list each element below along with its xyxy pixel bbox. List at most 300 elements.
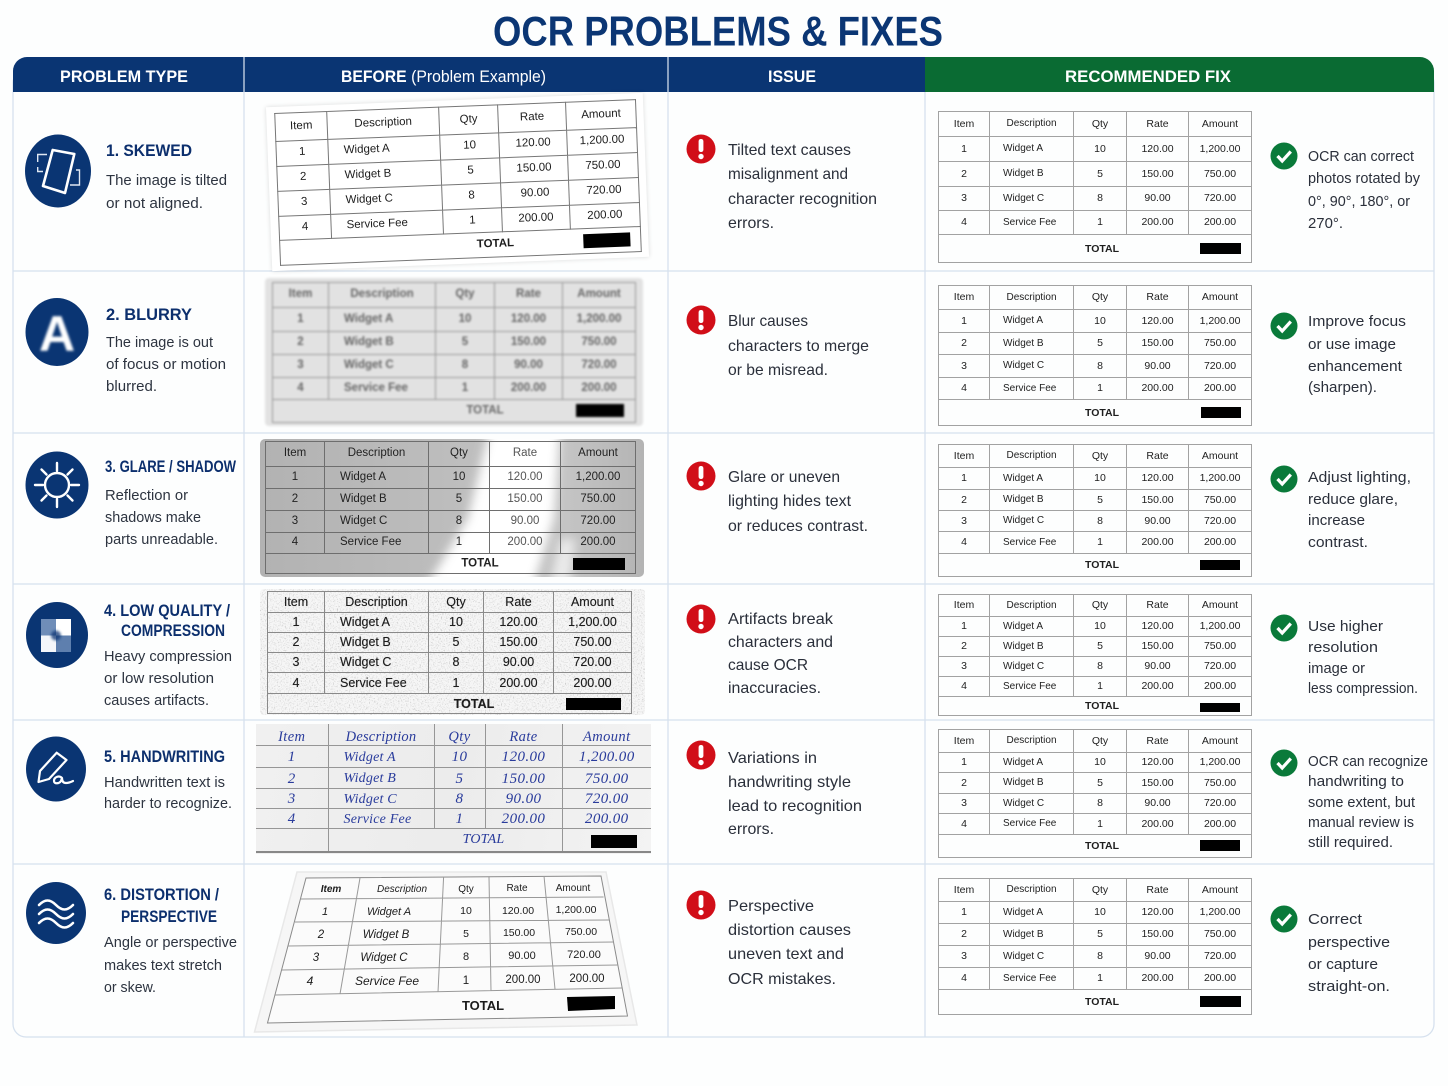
fix table: blurry: Amount <box>1202 291 1238 303</box>
before table: skewed <box>266 93 649 271</box>
fix table: handwriting: Widget B <box>1003 777 1044 788</box>
before table: perspective: Item <box>321 884 341 895</box>
before table: perspective: 750.00 <box>565 926 597 938</box>
description: blurry: The image is out <box>106 334 214 351</box>
fix table: distortion: Rate <box>1146 884 1169 896</box>
fix table: blurry: 750.00 <box>1204 337 1236 349</box>
icon: check <box>1270 906 1298 932</box>
before table: low quality: 10 <box>449 615 463 629</box>
fix table: glare: 90.00 <box>1144 515 1171 527</box>
before table: perspective: 720.00 <box>567 949 601 961</box>
row 5: handwriting <box>26 724 1428 858</box>
fix table: handwriting: Amount <box>1202 735 1238 747</box>
fix table: glare: 120.00 <box>1141 472 1174 484</box>
before table: perspective: 1 <box>463 975 469 987</box>
before table: blurry: 5 <box>462 336 468 348</box>
fix table: handwriting: 120.00 <box>1141 756 1174 768</box>
fix table: handwriting: 2 <box>961 777 967 789</box>
heading: handwriting: 5. HANDWRITING <box>104 747 225 766</box>
fix table: blurry: 8 <box>1097 360 1103 372</box>
fix table: distortion: Widget C <box>1003 950 1044 962</box>
before table: skewed: Amount <box>581 107 621 121</box>
fix table: handwriting: 750.00 <box>1204 777 1236 789</box>
fix table: blurry: 2 <box>961 337 967 349</box>
fix table: skewed: 1,200.00 <box>1200 143 1240 155</box>
fix table: low quality: 3 <box>961 660 967 672</box>
fix table: blurry: Widget B <box>1003 338 1044 348</box>
before table: blurry: Description <box>350 288 414 300</box>
fix table: glare: Widget A <box>1003 472 1043 484</box>
fix text: blurry <box>1308 313 1406 396</box>
before table: glare: 3 <box>292 515 298 527</box>
fix table: blurry: 1 <box>961 315 967 327</box>
before table: perspective: 90.00 <box>508 950 536 962</box>
before table: perspective: 1 <box>322 906 328 918</box>
fix table: skewed: 2 <box>961 168 967 180</box>
before table: handwriting: Widget C <box>344 792 397 806</box>
before table: perspective: 10 <box>460 905 472 917</box>
before table: blurry: Widget B <box>344 336 394 348</box>
before table: skewed: 4 <box>302 221 309 233</box>
fix table: skewed: Item <box>954 118 974 130</box>
fix table: distortion: 1,200.00 <box>1200 906 1240 918</box>
before table: low quality: Description <box>345 595 408 609</box>
fix table: glare: 200.00 <box>1141 536 1174 548</box>
column heading: recommended fix: RECOMMENDED FIX <box>1065 67 1232 86</box>
fix table: skewed: 10 <box>1094 143 1106 155</box>
before table: blurry: 90.00 <box>514 359 543 371</box>
before table: handwriting: 1 <box>456 811 463 827</box>
issue text: handwriting: lead to recognition <box>728 798 862 815</box>
description: distortion <box>104 934 237 996</box>
fix table: blurry: Widget C <box>1003 360 1044 371</box>
fix table: low quality: Widget A <box>1003 620 1043 632</box>
fix text: handwriting: handwriting to <box>1308 773 1404 790</box>
fix table: low quality: Widget C <box>1003 660 1044 672</box>
fix table: low quality: 200.00 <box>1141 680 1174 692</box>
fix table: low quality: Widget B <box>1003 640 1044 652</box>
fix table: low quality: 1 <box>961 620 967 632</box>
before table: handwriting: TOTAL <box>463 832 504 847</box>
icon: compressed blocks <box>26 602 88 668</box>
fix table: low quality: 1 <box>1097 680 1103 692</box>
before table: glare <box>260 439 644 577</box>
before table: glare: Service Fee <box>340 536 401 548</box>
fix table: distortion: Amount <box>1202 884 1238 896</box>
before table: handwriting: 200.00 <box>502 811 545 827</box>
fix table: handwriting: 90.00 <box>1144 797 1171 809</box>
icon: pen signature <box>26 736 86 802</box>
icon: check <box>1270 750 1298 776</box>
fix table: handwriting: 720.00 <box>1204 797 1236 809</box>
before table: perspective: Widget A <box>367 906 411 918</box>
fix table: glare: 200.00 <box>1204 536 1236 548</box>
before table: blurry: 1 <box>462 382 468 394</box>
heading: low quality / compression: COMPRESSION <box>121 621 225 640</box>
fix table: distortion: Service Fee <box>1003 972 1056 984</box>
fix table: distortion: 720.00 <box>1204 950 1236 962</box>
fix table: skewed: 120.00 <box>1141 143 1174 155</box>
description: handwriting: Handwritten text is <box>104 774 225 791</box>
fix table: skewed: 200.00 <box>1204 216 1236 228</box>
before table: low quality: 3 <box>293 655 299 669</box>
fix table: low quality: 4 <box>961 680 967 692</box>
before table: blurry: Item <box>289 288 312 300</box>
before table: handwriting: 1,200.00 <box>579 749 635 765</box>
heading: low quality / compression: 4. LOW QUALITY / <box>104 601 230 620</box>
before table: perspective <box>254 872 637 1032</box>
before table: blurry: 2 <box>297 336 304 348</box>
fix text: blurry: Improve focus <box>1308 313 1406 330</box>
issue text: handwriting: handwriting style <box>728 774 851 791</box>
fix table: skewed: TOTAL <box>1085 242 1119 254</box>
before table: glare: Item <box>284 447 306 459</box>
icon: alert <box>686 890 716 920</box>
fix table: skewed: 200.00 <box>1141 216 1174 228</box>
before table: low quality: 120.00 <box>499 615 538 629</box>
before table: low quality: 1,200.00 <box>568 615 617 629</box>
fix table: distortion: 8 <box>1097 950 1103 962</box>
fix table: glare: Item <box>954 450 974 462</box>
fix text: distortion: straight-on. <box>1308 978 1390 995</box>
fix table: distortion: TOTAL <box>1085 996 1119 1008</box>
issue text: blurry: Blur causes <box>728 313 808 330</box>
fix text: blurry: or use image <box>1308 336 1396 353</box>
issue text: distortion: uneven text and <box>728 946 844 963</box>
icon: check <box>1270 466 1298 492</box>
fix table: glare: 750.00 <box>1204 494 1236 506</box>
fix text: skewed: OCR can correct <box>1308 148 1415 165</box>
fix table: low quality: Item <box>954 599 974 611</box>
issue text: low quality <box>728 611 834 697</box>
description: low quality: Heavy compression <box>104 648 232 665</box>
fix table: blurry: 3 <box>961 360 967 372</box>
fix text: skewed <box>1308 148 1420 232</box>
before table: blurry: 750.00 <box>581 336 617 348</box>
before table: handwriting: 1 <box>288 749 296 765</box>
fix text: distortion: or capture <box>1308 956 1378 973</box>
before table: low quality: 720.00 <box>573 655 612 669</box>
fix table: blurry: 150.00 <box>1141 337 1174 349</box>
fix table: blurry: Service Fee <box>1003 382 1056 394</box>
fix table: skewed: 5 <box>1097 168 1103 180</box>
heading: blurry: 2. BLURRY <box>106 305 193 324</box>
before table: handwriting: Widget B <box>344 771 396 786</box>
fix text: glare / shadow: increase <box>1308 512 1365 529</box>
icon: waves <box>26 882 86 944</box>
before table: skewed: 200.00 <box>518 211 554 224</box>
fix table: skewed: Widget A <box>1003 143 1043 154</box>
before table: blurry: 1 <box>297 313 304 325</box>
before table: handwriting: 4 <box>288 811 296 827</box>
fix table: skewed <box>938 111 1252 263</box>
before table: glare: 10 <box>453 471 465 483</box>
fix table: skewed: 720.00 <box>1204 192 1236 204</box>
before table: handwriting: Item <box>278 729 305 745</box>
before table: glare: Widget B <box>340 493 387 505</box>
issue text: handwriting <box>728 750 862 838</box>
before table: handwriting: Amount <box>583 729 630 745</box>
before table: glare: Description <box>348 447 405 459</box>
fix table: low quality <box>938 594 1252 716</box>
fix table: skewed: Amount <box>1202 118 1238 130</box>
before table: skewed: 10 <box>463 140 476 152</box>
icon: check <box>1270 614 1298 642</box>
fix table: handwriting: 5 <box>1097 777 1103 789</box>
fix text: handwriting: OCR can recognize <box>1308 753 1428 770</box>
before table: handwriting: Description <box>346 729 416 745</box>
before table: handwriting: Widget A <box>344 750 396 764</box>
fix table: low quality: Service Fee <box>1003 680 1056 692</box>
fix table: low quality: 120.00 <box>1141 620 1174 632</box>
before table: handwriting: 2 <box>288 770 296 786</box>
issue text: blurry: characters to merge <box>728 338 869 355</box>
before table: skewed: Rate <box>520 110 544 123</box>
before table: perspective: Qty <box>458 884 474 895</box>
issue text: skewed <box>728 142 877 232</box>
fix table: glare <box>938 444 1252 577</box>
issue text: skewed: errors. <box>728 215 774 232</box>
description: low quality <box>104 648 232 709</box>
before table: glare: Widget C <box>340 515 387 527</box>
fix table: blurry: Item <box>954 291 974 303</box>
fix table: handwriting <box>938 729 1252 858</box>
before table: low quality: Item <box>284 595 308 609</box>
issue text: low quality: Artifacts break <box>728 611 834 628</box>
before table: handwriting: 720.00 <box>585 791 629 807</box>
icon: alert <box>686 462 716 490</box>
issue text: distortion: OCR mistakes. <box>728 971 836 988</box>
fix table: handwriting: 1 <box>961 756 967 768</box>
column heading: problem type: PROBLEM TYPE <box>60 67 188 86</box>
description: glare / shadow: parts unreadable. <box>105 531 218 548</box>
fix table: blurry: 200.00 <box>1204 382 1236 394</box>
fix table: low quality: Description <box>1006 600 1057 610</box>
fix table: blurry: 720.00 <box>1204 360 1236 372</box>
before table: low quality: 2 <box>293 635 299 649</box>
before table: skewed: 1 <box>469 214 476 226</box>
description: distortion: Angle or perspective <box>104 934 237 951</box>
fix text: glare / shadow <box>1308 469 1411 551</box>
description: skewed: or not aligned. <box>106 195 203 212</box>
before table: blurry: 1,200.00 <box>577 313 621 325</box>
before table: skewed: Widget B <box>344 168 392 182</box>
fix text: low quality: Use higher <box>1308 618 1383 635</box>
fix table: distortion: 5 <box>1097 928 1103 940</box>
before table: glare: 200.00 <box>580 536 616 548</box>
fix text: glare / shadow: contrast. <box>1308 534 1368 551</box>
fix table: handwriting: Item <box>954 735 974 747</box>
fix table: distortion: 150.00 <box>1141 928 1174 940</box>
before table: glare: 1 <box>456 536 462 548</box>
issue text: handwriting: Variations in <box>728 750 817 767</box>
fix table: blurry: TOTAL <box>1085 406 1119 418</box>
before table: blurry: Rate <box>516 288 541 300</box>
before table: perspective: Amount <box>556 883 590 894</box>
fix table: skewed: Qty <box>1092 118 1108 130</box>
before table: low quality: TOTAL <box>454 696 494 710</box>
fix table: distortion <box>938 878 1252 1015</box>
fix table: blurry: Widget A <box>1003 315 1043 326</box>
description: blurry: blurred. <box>106 378 157 395</box>
before table: low quality: Widget B <box>340 635 391 649</box>
heading: distortion / perspective: 6. DISTORTION / <box>104 885 219 904</box>
fix table: skewed: 3 <box>961 192 967 204</box>
fix table: distortion: Description <box>1006 884 1057 895</box>
fix text: glare / shadow: reduce glare, <box>1308 491 1398 508</box>
fix table: low quality: 8 <box>1097 660 1103 672</box>
icon: sun <box>26 452 88 518</box>
before table: skewed: 8 <box>468 190 475 202</box>
fix text: skewed: 0°, 90°, 180°, or <box>1308 193 1410 210</box>
fix table: distortion: 1 <box>1097 972 1103 984</box>
fix text: skewed: photos rotated by <box>1308 170 1420 187</box>
before table: glare: 5 <box>456 493 462 505</box>
before table: perspective: 150.00 <box>503 927 535 939</box>
before table: perspective: 200.00 <box>505 974 541 986</box>
before table: blurry: 200.00 <box>581 382 617 394</box>
before table: perspective: Widget B <box>363 929 410 941</box>
icon: check <box>1270 142 1298 170</box>
issue text: low quality: inaccuracies. <box>728 680 821 697</box>
before table: handwriting <box>256 724 651 854</box>
issue text: glare / shadow: Glare or uneven <box>728 469 840 486</box>
before table: perspective: 5 <box>463 928 469 940</box>
fix table: blurry: 90.00 <box>1144 360 1171 372</box>
fix table: handwriting: 150.00 <box>1141 777 1174 789</box>
fix table: glare: Description <box>1006 450 1057 461</box>
before table: blurry: Widget A <box>344 313 393 325</box>
before table: skewed: 90.00 <box>520 187 550 200</box>
before table: blurry: Widget C <box>344 359 394 371</box>
fix table: glare: 1,200.00 <box>1200 472 1240 484</box>
icon: alert <box>686 134 716 164</box>
before table: glare: Amount <box>578 447 618 459</box>
fix table: glare: Service Fee <box>1003 536 1056 548</box>
before table: skewed: Widget C <box>345 193 393 207</box>
fix table: distortion: Widget B <box>1003 928 1044 940</box>
fix table: blurry: 1 <box>1097 382 1103 394</box>
before table: glare: 150.00 <box>507 493 543 505</box>
fix table: skewed: Rate <box>1146 118 1169 130</box>
fix table: glare: 150.00 <box>1141 494 1174 506</box>
fix table: skewed: 750.00 <box>1204 168 1236 180</box>
heading: low quality / compression <box>104 601 230 640</box>
fix table: skewed: 1 <box>1097 216 1103 228</box>
before table: handwriting: Rate <box>509 729 538 745</box>
row 1: skewed <box>25 92 1420 272</box>
fix table: low quality: 90.00 <box>1144 660 1171 672</box>
fix text: low quality <box>1308 618 1418 697</box>
fix text: distortion: perspective <box>1308 934 1390 951</box>
before table: glare: 2 <box>292 493 298 505</box>
fix table: skewed: 90.00 <box>1144 192 1171 204</box>
fix table: handwriting: 1,200.00 <box>1200 756 1240 768</box>
fix table: handwriting: Qty <box>1092 735 1108 747</box>
issue text: blurry <box>728 313 869 379</box>
fix table: skewed: Service Fee <box>1003 216 1056 228</box>
fix table: handwriting: Rate <box>1146 735 1169 747</box>
before table: skewed: 150.00 <box>516 162 552 175</box>
before table: blurry: 10 <box>459 313 471 325</box>
before table: glare: 4 <box>292 536 298 548</box>
before table: handwriting: 90.00 <box>506 791 541 807</box>
before table: glare: 1 <box>292 471 298 483</box>
before table: skewed: 3 <box>301 196 308 208</box>
before table: handwriting: 750.00 <box>585 770 629 786</box>
description: skewed: The image is tilted <box>106 172 227 189</box>
before table: low quality: 200.00 <box>499 676 538 690</box>
before table: low quality: 4 <box>293 676 299 690</box>
icon: alert <box>686 306 716 334</box>
fix text: blurry: (sharpen). <box>1308 379 1377 396</box>
before table: low quality: Rate <box>505 595 532 609</box>
fix table: glare: Widget B <box>1003 494 1044 505</box>
fix table: skewed: Description <box>1006 118 1057 129</box>
before table: handwriting: Service Fee <box>344 812 411 826</box>
row 6: distortion / perspective <box>26 871 1390 1033</box>
title: OCR PROBLEMS & FIXES <box>493 8 943 54</box>
description: handwriting <box>104 774 232 812</box>
description: glare / shadow <box>105 487 218 548</box>
fix table: handwriting: 10 <box>1094 756 1106 768</box>
fix table: skewed: Widget C <box>1003 192 1044 204</box>
before table: perspective: Rate <box>506 883 528 894</box>
fix table: handwriting: 4 <box>961 818 967 830</box>
description: distortion: makes text stretch <box>104 957 222 974</box>
issue text: glare / shadow: lighting hides text <box>728 493 852 510</box>
before table: skewed: Qty <box>459 113 478 126</box>
before table: perspective: 2 <box>317 929 325 941</box>
before table: skewed: 2 <box>300 171 307 183</box>
fix table: glare: 5 <box>1097 494 1103 506</box>
icon: alert <box>686 604 716 634</box>
issue text: handwriting: errors. <box>728 821 774 838</box>
before table: blurry: Amount <box>577 288 621 300</box>
before table: perspective: TOTAL <box>462 998 504 1013</box>
description: handwriting: harder to recognize. <box>104 795 232 812</box>
header bar <box>13 57 1434 92</box>
before table: perspective: 3 <box>313 952 320 964</box>
before table: glare: 90.00 <box>511 515 539 527</box>
before table: skewed: 1,200.00 <box>579 134 625 148</box>
fix table: distortion: 90.00 <box>1144 950 1171 962</box>
fix table: low quality: Amount <box>1202 599 1238 611</box>
fix text: handwriting: still required. <box>1308 834 1393 851</box>
before table: glare: Qty <box>450 447 468 459</box>
fix table: glare: 4 <box>961 536 967 548</box>
row 3: glare / shadow <box>26 439 1411 577</box>
before table: low quality: 750.00 <box>573 635 612 649</box>
before table: skewed: Service Fee <box>346 217 408 231</box>
fix table: handwriting: 200.00 <box>1141 818 1174 830</box>
fix table: distortion: 4 <box>961 972 967 984</box>
fix table: glare: Rate <box>1146 450 1169 462</box>
fix text: handwriting: some extent, but <box>1308 794 1416 811</box>
issue text: distortion: distortion causes <box>728 922 851 939</box>
fix table: handwriting: 1 <box>1097 818 1103 830</box>
fix table: glare: 3 <box>961 515 967 527</box>
before table: low quality: 1 <box>453 676 459 690</box>
fix table: glare: 2 <box>961 494 967 506</box>
before table: low quality: 1 <box>293 615 299 629</box>
fix text: handwriting: manual review is <box>1308 814 1414 831</box>
fix table: low quality: 720.00 <box>1204 660 1236 672</box>
fix table: low quality: Qty <box>1092 599 1108 611</box>
before table: skewed: Widget A <box>343 143 390 157</box>
before table: handwriting: 3 <box>288 791 296 807</box>
before table: glare: 120.00 <box>507 471 543 483</box>
